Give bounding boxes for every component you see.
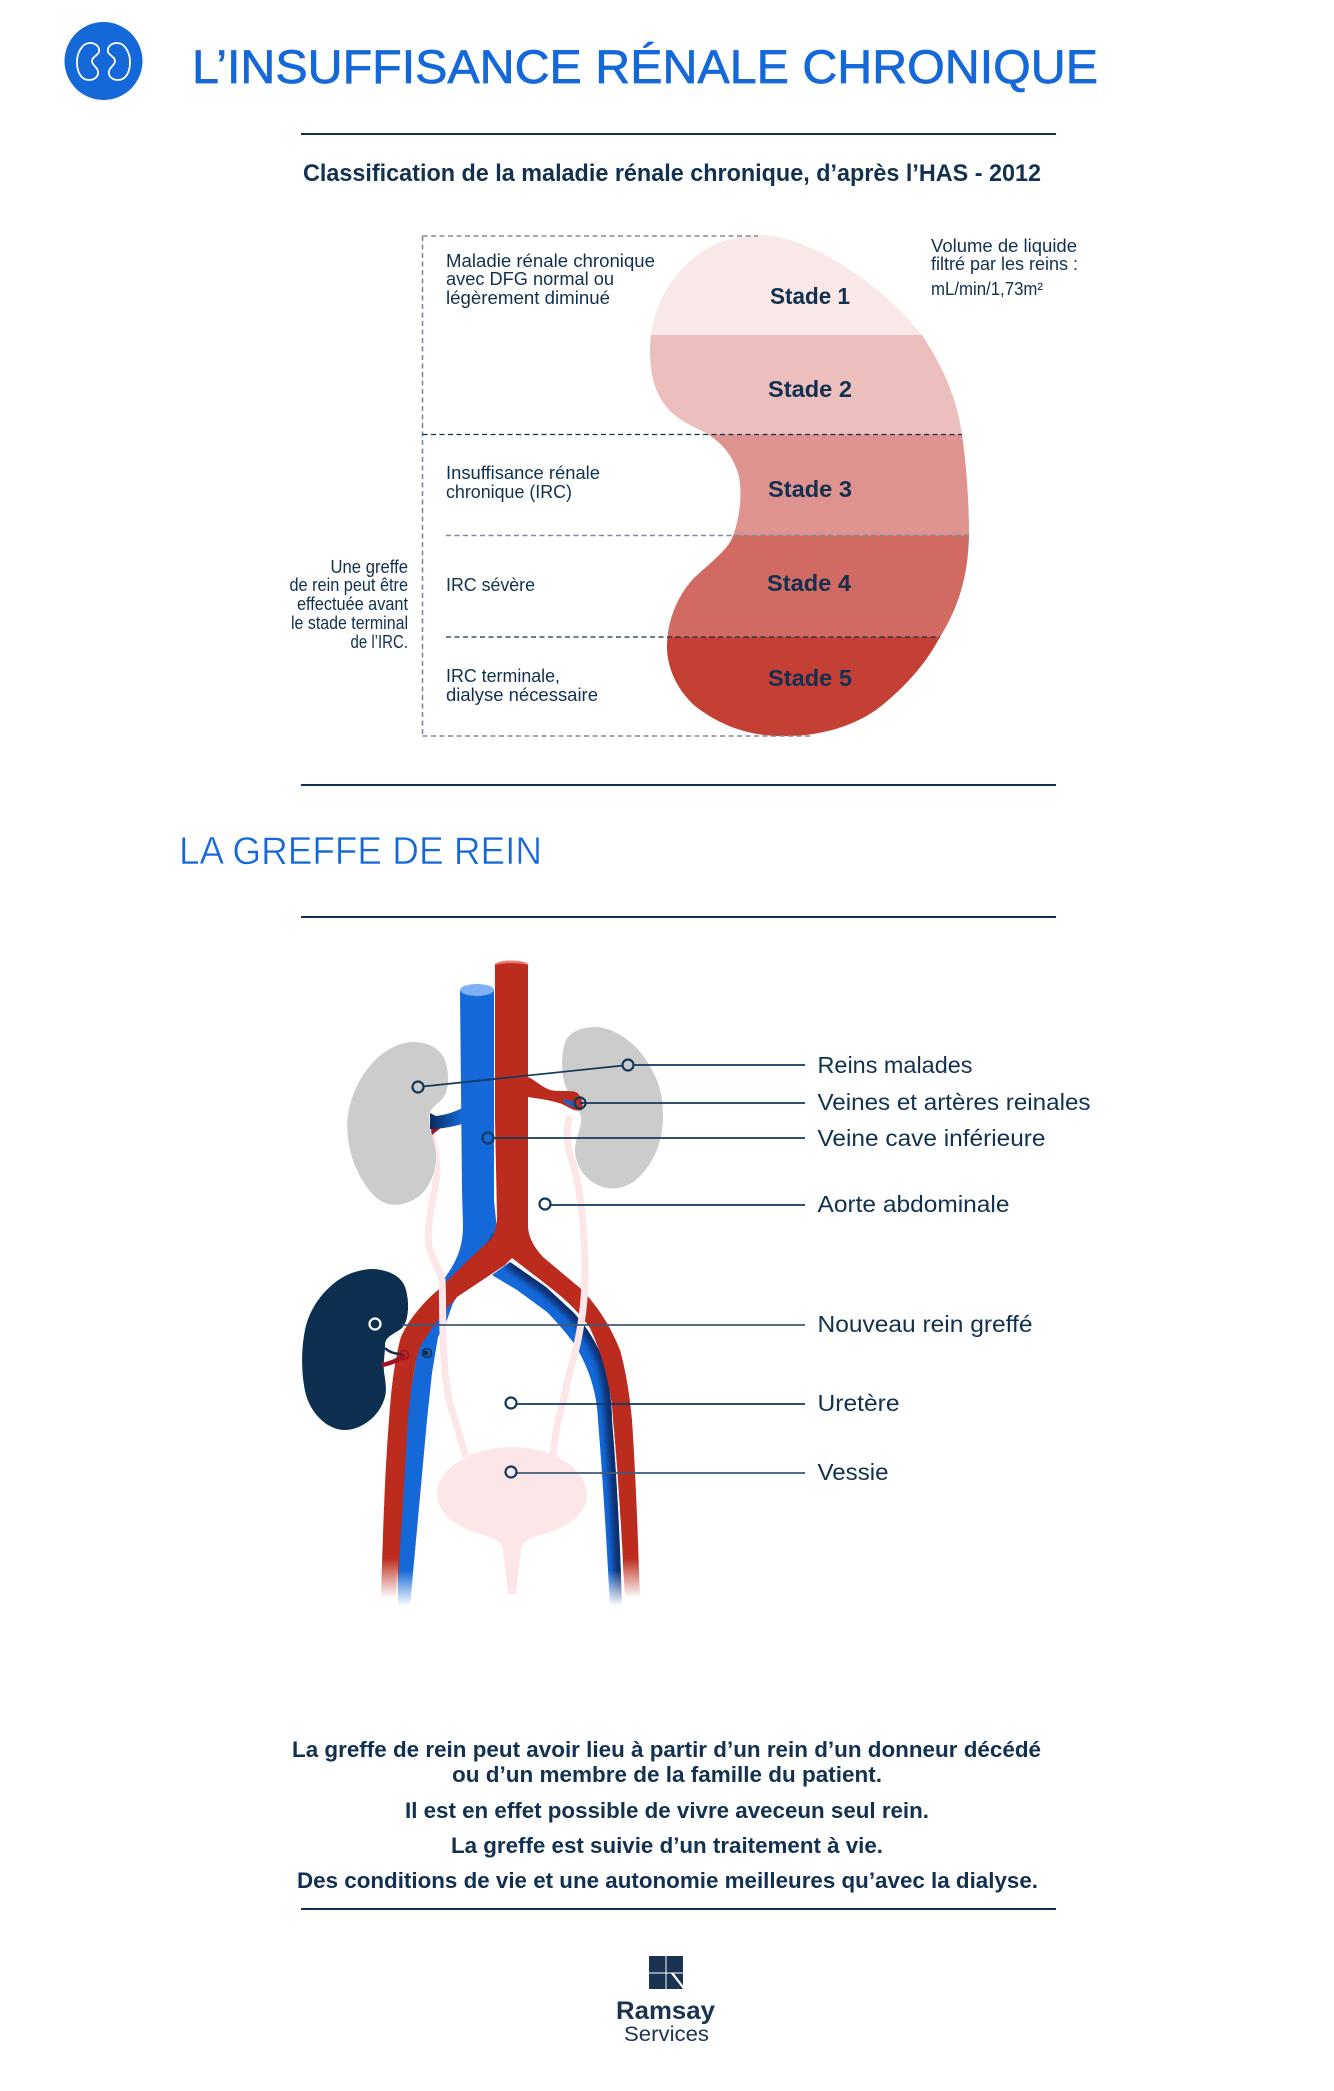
note: transplant timing: le stade terminal xyxy=(291,612,408,633)
anatomy labels: Vessie xyxy=(818,1459,888,1485)
right renal vessels xyxy=(528,1077,582,1111)
note: transplant timing: effectuée avant xyxy=(297,593,408,614)
anatomy labels: Uretère xyxy=(818,1390,900,1416)
note: transplant timing xyxy=(290,556,408,652)
divider xyxy=(301,1908,1056,1910)
stage labels: Stade 1 xyxy=(770,283,850,309)
conclusion text: La greffe est suivie d’un traitement à vie. xyxy=(451,1833,883,1858)
stage descriptions: avec DFG normal ou xyxy=(446,268,614,289)
stage descriptions: Insuffisance rénale xyxy=(446,462,600,483)
anatomical diagram xyxy=(302,960,1090,1610)
note: filtered volume xyxy=(931,236,1078,299)
divider xyxy=(301,916,1056,918)
note: transplant timing: Une greffe xyxy=(330,556,408,577)
right iliac vein xyxy=(492,1262,622,1605)
sub wordmark: Services xyxy=(624,2023,709,2046)
diseased kidney left xyxy=(347,1042,448,1205)
conclusion text: La greffe de rein peut avoir lieu à partir d’un rein d’un donneur décédé xyxy=(292,1737,1041,1762)
note: filtered volume: Volume de liquide xyxy=(931,236,1077,256)
anatomy labels: Veine cave inférieure xyxy=(818,1125,1046,1151)
kidney stage bands xyxy=(640,230,980,739)
icon: kidneys logo xyxy=(64,22,142,100)
anatomy labels: Nouveau rein greffé xyxy=(818,1311,1032,1337)
vena cava xyxy=(396,984,497,1606)
stage descriptions: chronique (IRC) xyxy=(446,481,572,502)
heading: la greffe de rein: LA GREFFE DE REIN xyxy=(179,830,542,873)
note: filtered volume: filtré par les reins : xyxy=(931,254,1078,274)
dashed classification frame xyxy=(422,236,969,736)
note: transplant timing: de rein peut être xyxy=(290,574,408,595)
stage descriptions: IRC terminale, xyxy=(446,665,560,686)
note: filtered volume: mL/min/1,73m² xyxy=(931,279,1043,299)
anatomy labels xyxy=(818,1052,1090,1485)
logo: Ramsay Services xyxy=(616,1956,715,2046)
graft vessels xyxy=(382,1348,432,1365)
stage descriptions: légèrement diminué xyxy=(446,287,610,308)
conclusion text xyxy=(292,1737,1041,1893)
stage labels: Stade 4 xyxy=(767,570,851,596)
divider xyxy=(301,133,1056,135)
conclusion text: Il est en effet possible de vivre aveceun seul rein. xyxy=(405,1798,929,1823)
aorta xyxy=(381,960,640,1600)
wordmark: Ramsay xyxy=(616,1997,715,2025)
left renal vessels xyxy=(430,1108,462,1135)
anatomy labels: Veines et artères reinales xyxy=(818,1089,1090,1115)
note: transplant timing: de l’IRC. xyxy=(350,631,408,652)
stage labels: Stade 2 xyxy=(768,376,852,402)
leader lines and markers xyxy=(370,1060,805,1478)
subtitle: Classification de la maladie rénale chronique, d’après l’HAS - 2012 xyxy=(303,160,1041,187)
conclusion text: ou d’un membre de la famille du patient. xyxy=(452,1762,882,1787)
stage labels: Stade 5 xyxy=(768,665,852,691)
anatomy labels: Reins malades xyxy=(818,1052,972,1078)
title: L’INSUFFISANCE RÉNALE CHRONIQUE xyxy=(192,41,1098,94)
anatomy labels: Aorte abdominale xyxy=(818,1191,1010,1217)
logo mark xyxy=(649,1956,683,1989)
stage labels xyxy=(767,283,852,691)
stage descriptions: IRC sévère xyxy=(446,574,535,595)
panel: kidney stage classification xyxy=(290,230,1078,739)
stage descriptions: dialyse nécessaire xyxy=(446,684,598,705)
divider xyxy=(301,784,1056,786)
stage descriptions: Maladie rénale chronique xyxy=(446,250,655,271)
transplanted kidney xyxy=(302,1269,408,1430)
bladder xyxy=(437,1447,587,1594)
ureters xyxy=(428,1117,585,1457)
diseased kidney right xyxy=(562,1027,663,1188)
conclusion text: Des conditions de vie et une autonomie meilleures qu’avec la dialyse. xyxy=(297,1868,1038,1893)
stage labels: Stade 3 xyxy=(768,476,852,502)
stage descriptions xyxy=(446,250,655,705)
bottom fade xyxy=(375,1558,644,1606)
